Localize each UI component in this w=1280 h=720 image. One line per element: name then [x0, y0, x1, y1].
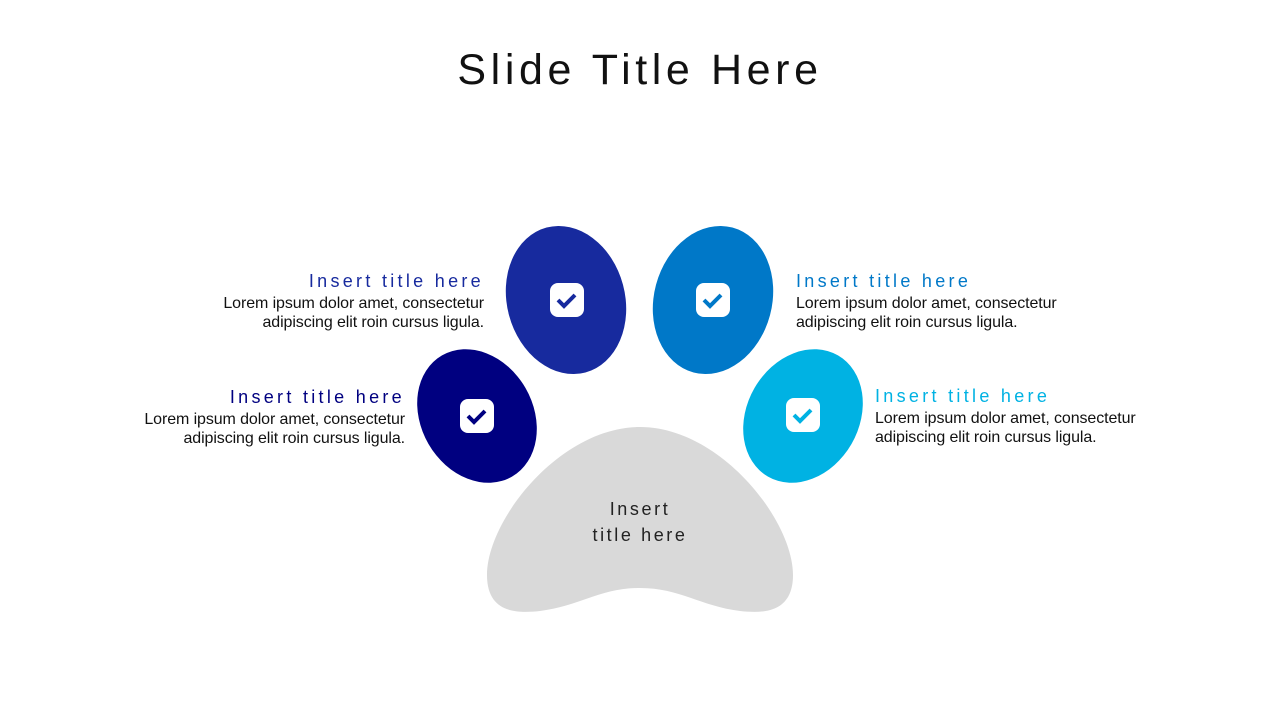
text block top-left: Lorem ipsum dolor amet, consectetur — [223, 295, 484, 312]
pad — [487, 427, 793, 612]
pad: Insert — [610, 499, 670, 519]
title: Slide Title Here — [457, 46, 823, 94]
toe 4 — [720, 327, 886, 505]
text block top-right: Lorem ipsum dolor amet, consectetur — [796, 295, 1057, 312]
text block top-right — [796, 271, 1057, 331]
toe 1 — [490, 212, 642, 388]
toe 2 — [637, 212, 789, 388]
text block top-left: adipiscing elit roin cursus ligula. — [262, 314, 484, 331]
text block bottom-right: Lorem ipsum dolor amet, consectetur — [875, 410, 1136, 427]
text block bottom-right: Insert title here — [875, 386, 1050, 406]
text block top-left: Insert title here — [309, 271, 484, 291]
toe 3 — [394, 327, 560, 505]
text block bottom-right — [875, 386, 1136, 446]
text block top-left — [223, 271, 484, 331]
text block top-right: Insert title here — [796, 271, 971, 291]
text block top-right: adipiscing elit roin cursus ligula. — [796, 314, 1018, 331]
pad: title here — [592, 525, 688, 545]
text block bottom-left — [144, 387, 405, 447]
text block bottom-left: Insert title here — [230, 387, 405, 407]
text block bottom-left: Lorem ipsum dolor amet, consectetur — [144, 411, 405, 428]
text block bottom-right: adipiscing elit roin cursus ligula. — [875, 429, 1097, 446]
text block bottom-left: adipiscing elit roin cursus ligula. — [183, 430, 405, 447]
